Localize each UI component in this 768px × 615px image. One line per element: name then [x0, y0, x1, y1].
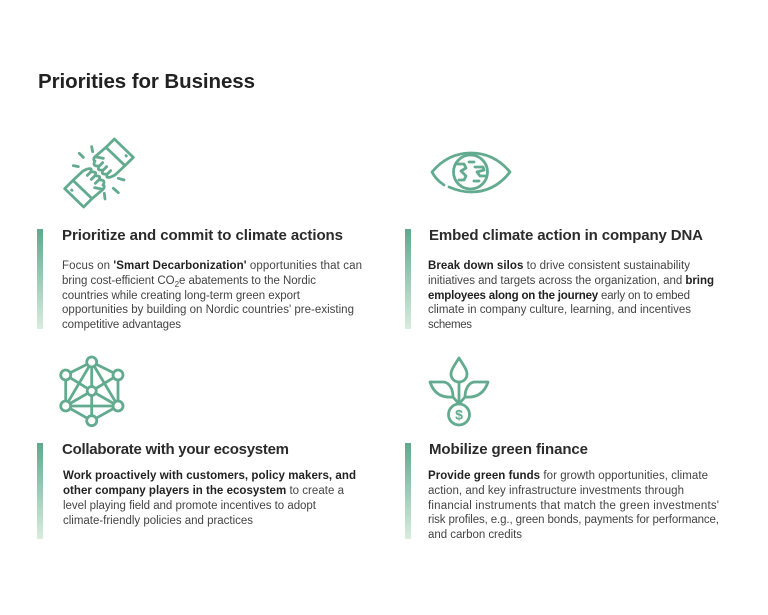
icon: plant with dollar coin [430, 358, 488, 425]
body text [63, 470, 356, 527]
body text: risk profiles, e.g., green bonds, payments for performance, [428, 514, 719, 526]
body text: schemes [428, 319, 472, 331]
body text: climate-friendly policies and practices [63, 515, 253, 527]
body text: e abatements to the Nordic [179, 275, 316, 287]
body text [428, 260, 714, 331]
heading: Embed climate action in company DNA [429, 227, 703, 244]
body text: employees along on the journey early on to embed [428, 290, 690, 302]
body text: other company players in the ecosystem to create a [63, 485, 345, 497]
accent bar [37, 229, 43, 329]
body text: bring cost-efficient CO [62, 275, 175, 287]
body text: initiatives and targets across the organization, and bring [428, 275, 714, 287]
panel: prioritize and commit [37, 139, 362, 331]
body text [62, 260, 362, 331]
icon: network [61, 357, 123, 426]
body text: Break down silos to drive consistent sustainability [428, 260, 690, 272]
body text: Provide green funds for growth opportunities, climate [428, 470, 708, 482]
icon label: dollar sign: $ [455, 406, 463, 422]
body text: Focus on 'Smart Decarbonization' opportunities that can [62, 260, 362, 272]
body text: countries while creating long-term green export [62, 290, 301, 302]
icon: eye with globe [432, 153, 510, 192]
body text: and carbon credits [428, 529, 522, 541]
panel: mobilize green finance [405, 358, 719, 541]
accent bar [405, 443, 411, 539]
panel: collaborate with ecosystem [37, 357, 356, 539]
body text: action, and key infrastructure investments through [428, 485, 684, 497]
title: Priorities for Business [38, 70, 255, 93]
body text: 2 [175, 280, 180, 289]
body text: financial instruments that match the green investments' [428, 500, 719, 512]
body text: competitive advantages [62, 319, 181, 331]
accent bar [405, 229, 411, 329]
accent bar [37, 443, 43, 539]
body text: climate in company culture, learning, and incentives [428, 304, 691, 316]
panel: embed climate action [405, 153, 714, 331]
body text [428, 470, 719, 541]
heading: Prioritize and commit to climate actions [62, 227, 343, 244]
body text: level playing field and promote incentives to adopt [63, 500, 317, 512]
heading: Mobilize green finance [429, 441, 588, 458]
icon: fist bump [65, 139, 133, 207]
body text: Work proactively with customers, policy makers, and [63, 470, 356, 482]
heading: Collaborate with your ecosystem [62, 441, 289, 458]
body text: opportunities by building on Nordic countries' pre-existing [62, 304, 354, 316]
